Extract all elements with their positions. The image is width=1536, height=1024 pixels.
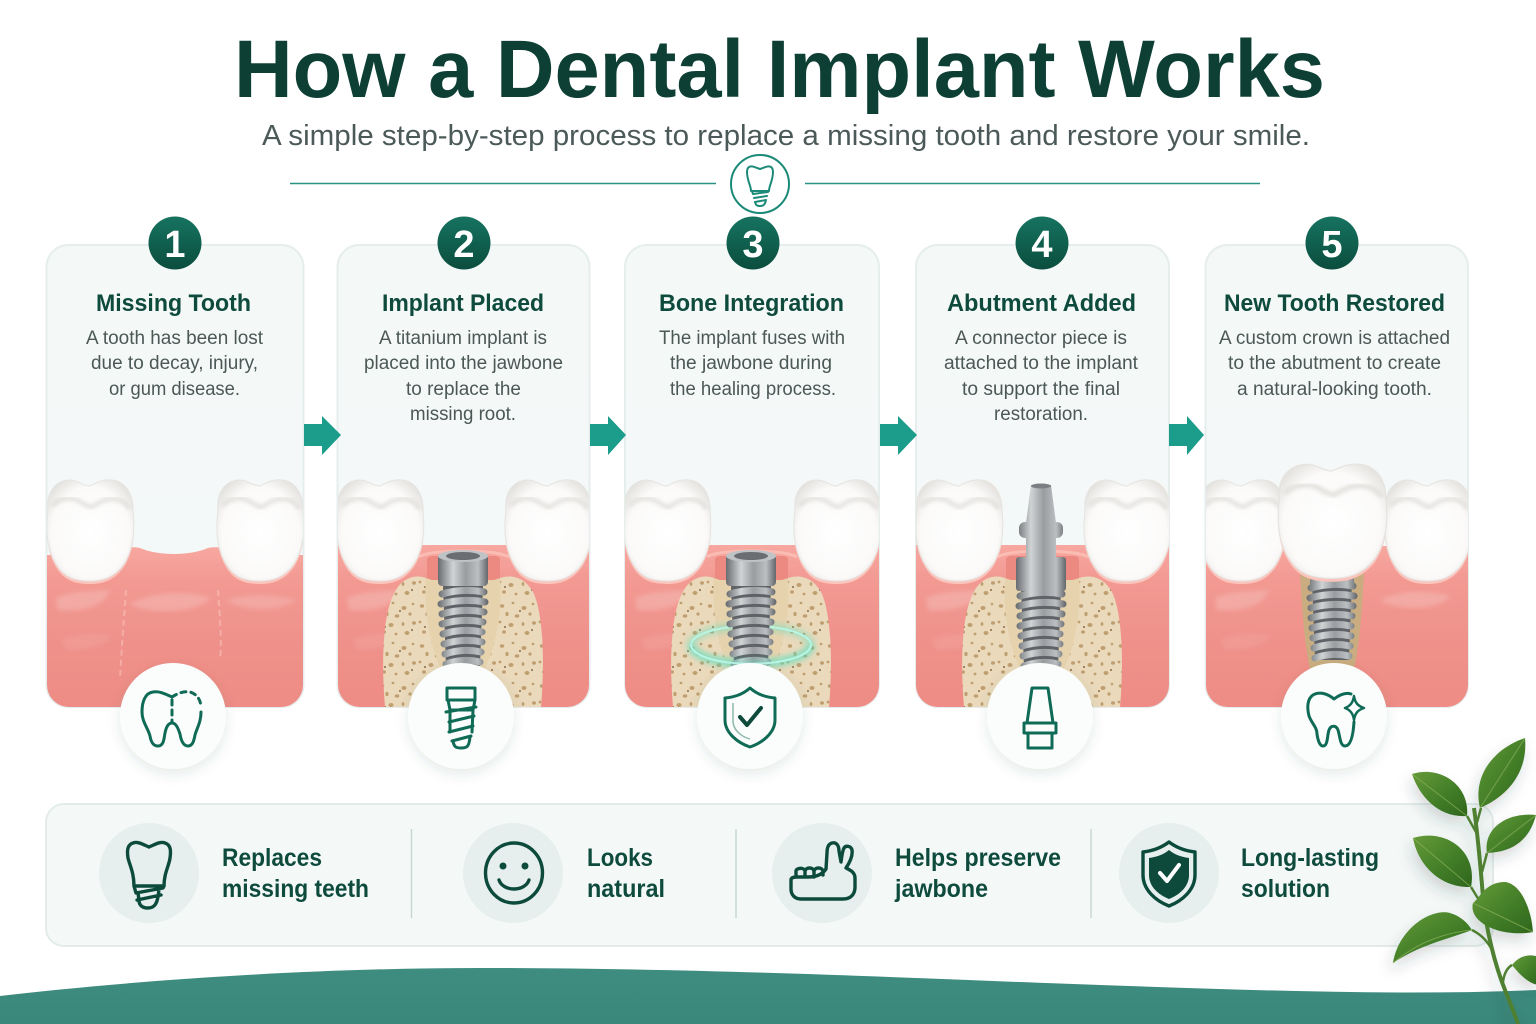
card 1 description: [86, 328, 264, 400]
step 3 badge: 3: [742, 224, 764, 266]
icon: smile: [463, 823, 563, 923]
arrow 4: [1169, 416, 1204, 455]
card 5 description: [1219, 328, 1450, 400]
text: helps preserve jawbone: [894, 844, 1061, 903]
text: looks natural: natural: [587, 875, 665, 903]
card 2 description: to replace the: [406, 379, 521, 400]
step 3 badge: [726, 216, 780, 270]
step 5 badge: [1306, 216, 1358, 270]
card 2: implant placed: [337, 216, 592, 769]
card 4 heading: Abutment Added: [947, 290, 1136, 317]
card 2 description: A titanium implant is: [379, 328, 547, 349]
icon: jawbone: [772, 823, 872, 923]
step 1 badge: [148, 216, 202, 270]
card 1 panel: [46, 245, 304, 707]
card 4 description: A connector piece is: [955, 328, 1127, 349]
text: replaces missing teeth: missing teeth: [222, 875, 369, 903]
card 5 description: A custom crown is attached: [1219, 328, 1450, 349]
benefits background: [46, 804, 1493, 946]
benefit: long-lasting solution: [1119, 823, 1379, 923]
illustration: missing tooth gap: [47, 480, 304, 707]
card 5 heading: New Tooth Restored: [1224, 290, 1445, 317]
card 3 description: [659, 328, 845, 400]
card 2 description: placed into the jawbone: [364, 353, 563, 374]
card 2 description: [364, 328, 563, 425]
icon circle: implant screw: [408, 663, 514, 769]
card 3 panel: [625, 245, 879, 707]
card 5: new tooth restored: [1199, 216, 1472, 769]
step 1 badge: 1: [164, 224, 186, 266]
icon circle: shield with check: [697, 663, 803, 769]
benefit: looks natural: [463, 823, 665, 923]
icon circle: tooth with dashed outline: [120, 663, 226, 769]
step 2 badge: [438, 216, 490, 270]
step 4 badge: [1016, 216, 1068, 270]
text: helps preserve jawbone: Helps preserve: [895, 844, 1061, 872]
benefit: replaces missing teeth: [99, 823, 369, 923]
card 3 heading: Bone Integration: [659, 290, 844, 317]
divider with implant icon: [290, 155, 1260, 213]
text: long-lasting solution: solution: [1241, 875, 1330, 903]
card 3 description: the healing process.: [670, 379, 836, 400]
card 2 panel: [338, 245, 590, 707]
card 4 description: [944, 328, 1139, 425]
arrow 3: [880, 416, 917, 455]
card 3: bone integration: [624, 216, 881, 769]
step 2 badge: 2: [453, 224, 475, 266]
card 1 description: due to decay, injury,: [91, 353, 258, 374]
illustration: abutment on implant: [916, 480, 1171, 707]
icon: filled shield: [1119, 823, 1219, 923]
text: replaces missing teeth: Replaces: [222, 844, 322, 872]
text: long-lasting solution: Long-lasting: [1241, 844, 1379, 872]
card 3 description: the jawbone during: [670, 353, 832, 374]
arrow 1: [304, 416, 341, 455]
bottom wave: [0, 968, 1536, 1024]
illustration: crown on implant: [1199, 464, 1472, 707]
benefits panel: [46, 804, 1493, 946]
icon: tooth implant: [99, 823, 199, 923]
card 5 description: a natural-looking tooth.: [1237, 379, 1432, 400]
card 4: abutment added: [916, 216, 1171, 769]
text: helps preserve jawbone: jawbone: [894, 875, 988, 903]
card 3 description: The implant fuses with: [659, 328, 845, 349]
card 4 panel: [916, 245, 1169, 707]
card 1: missing tooth: [46, 216, 304, 769]
card 1 description: or gum disease.: [109, 379, 240, 400]
card 4 description: to support the final: [962, 379, 1120, 400]
illustration: bone fusing with glow ring: [624, 480, 881, 707]
text: looks natural: Looks: [587, 844, 653, 872]
benefit: helps preserve jawbone: [772, 823, 1061, 923]
card 5 description: to the abutment to create: [1228, 353, 1441, 374]
text: looks natural: [587, 844, 665, 903]
arrow 2: [590, 416, 626, 455]
title: How a Dental Implant Works: [234, 24, 1325, 115]
text: replaces missing teeth: [222, 844, 369, 903]
card 2 description: missing root.: [410, 404, 516, 425]
icon circle: abutment: [987, 663, 1093, 769]
card 2 heading: Implant Placed: [382, 290, 544, 317]
step 4 badge: 4: [1031, 224, 1053, 266]
decorative leaf branch: [1393, 738, 1536, 1024]
icon circle: sparkling tooth: [1281, 663, 1387, 769]
card 5 panel: [1206, 245, 1468, 707]
card 4 description: attached to the implant: [944, 353, 1139, 374]
illustration: implant in bone: [337, 480, 592, 707]
card 1 heading: Missing Tooth: [96, 290, 251, 317]
text: long-lasting solution: [1241, 844, 1379, 903]
card 4 description: restoration.: [994, 404, 1088, 425]
card 1 description: A tooth has been lost: [86, 328, 264, 349]
subtitle: A simple step-by-step process to replace a missing tooth and restore your smile.: [262, 120, 1310, 152]
step 5 badge: 5: [1321, 224, 1343, 266]
